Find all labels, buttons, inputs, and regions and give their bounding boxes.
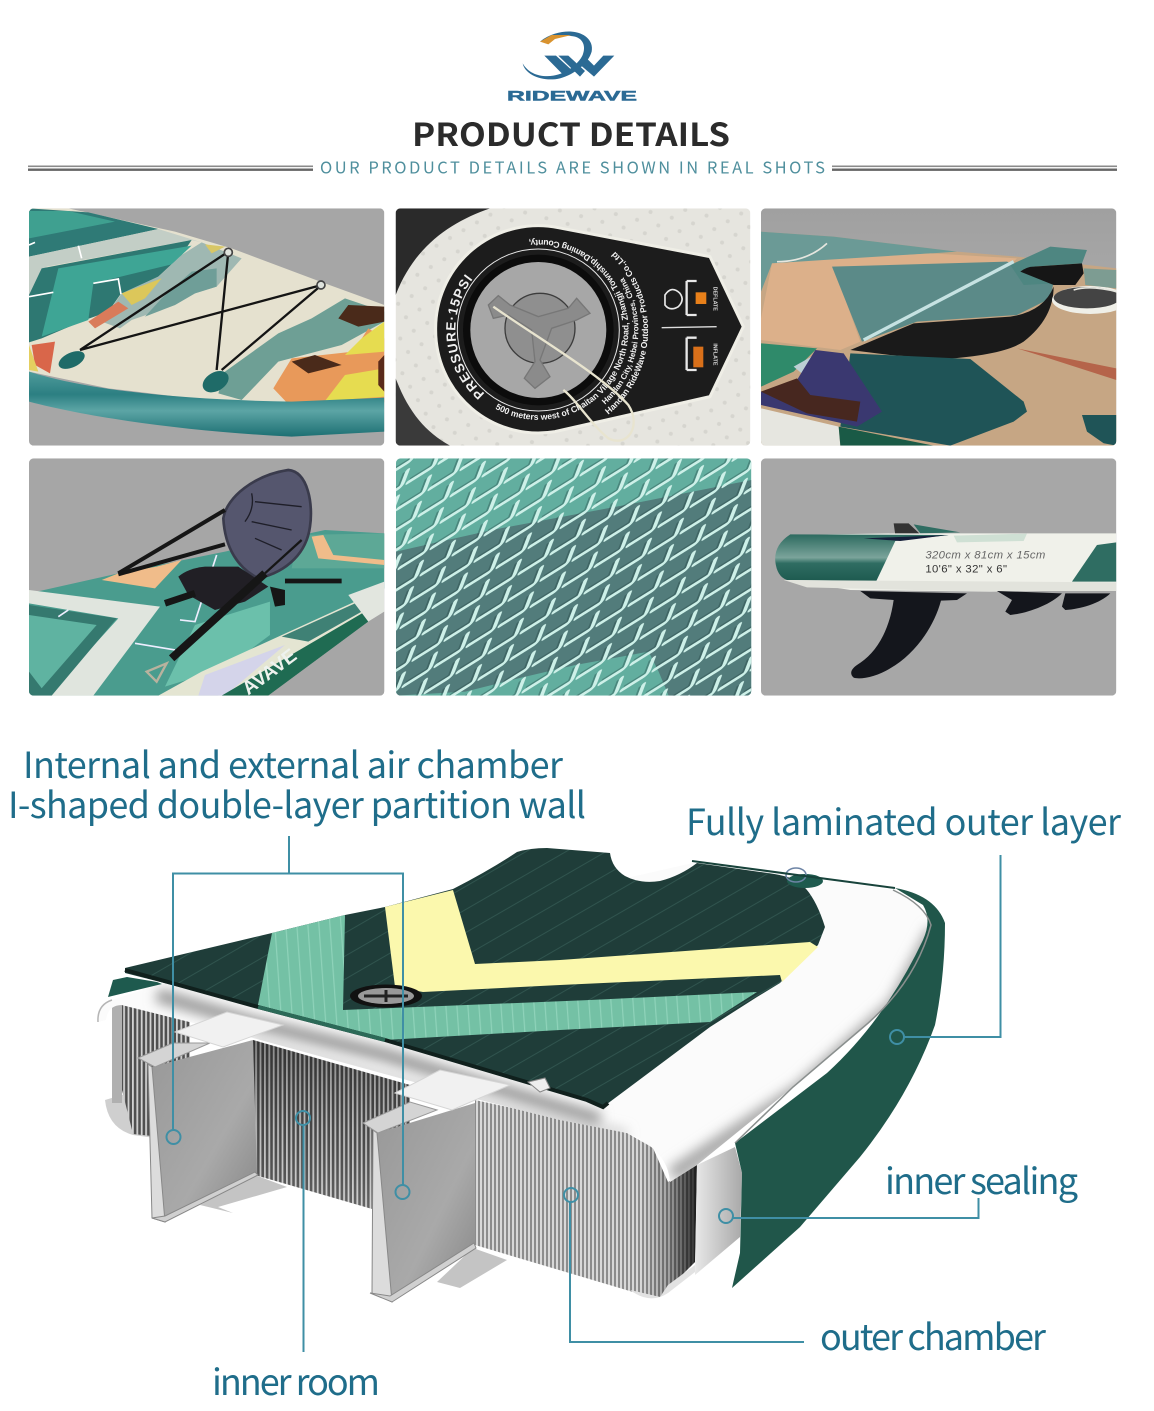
photo: air valve badge [396, 208, 750, 446]
logo: RideWave [507, 32, 637, 103]
inflate and deflate icons [662, 281, 717, 370]
bungee cords [80, 252, 322, 370]
back curl and left ribs [105, 1003, 190, 1140]
I-beam 1 [138, 1040, 258, 1222]
inner sealing layer [695, 1147, 742, 1275]
white top tabs [175, 1012, 510, 1110]
inflate and deflate icons: INFLATE [711, 343, 717, 366]
rear feet [200, 1175, 507, 1288]
handle [894, 523, 920, 534]
inflate and deflate icons: DEFLATE [711, 287, 717, 311]
seat back [223, 470, 311, 578]
badge [436, 226, 743, 433]
photo: kayak seat [29, 458, 384, 700]
ring text: Handan City, Hebei Provinces, China [602, 277, 638, 404]
tail ring [786, 868, 823, 888]
subtitle with rules: OUR PRODUCT DETAILS ARE SHOWN IN REAL SHOTS [320, 154, 825, 178]
cross-section diagram of board [98, 848, 945, 1302]
rail [29, 372, 384, 437]
callout: air chamber partition wall: Internal and external air chamber [23, 737, 564, 789]
logo: RideWave: RIDEWAVE [507, 88, 637, 104]
photo: tail kick pad [761, 208, 1129, 446]
ring text: Handan RideWave Outdoor Products Co.,Ltd [604, 252, 648, 414]
seat pad [178, 567, 268, 610]
title: PRODUCT DETAILS [412, 110, 730, 156]
deck pad [108, 848, 895, 1107]
callout: inner sealing [719, 1153, 1078, 1223]
callout: inner sealing: inner sealing [885, 1153, 1078, 1205]
fins [851, 591, 1110, 678]
ring text: 500 meters west of Chaitan Village North Road, Zhangji Township,Daming County, [496, 238, 630, 420]
board body [787, 533, 1116, 592]
dimensions text [926, 551, 1045, 572]
callout: air chamber partition wall [8, 737, 586, 1199]
ring text: PRESSURE·15PSI [446, 274, 484, 400]
ring text [446, 238, 648, 420]
photo: nose with bungee [29, 208, 384, 446]
dimensions text: 10'6" x 32" x 6" [925, 563, 1007, 575]
board: AVAVE [239, 645, 301, 700]
end rib panel [475, 1100, 697, 1298]
kick pad side [850, 287, 1054, 359]
callout: inner room [212, 1111, 380, 1406]
callout: fully laminated outer layer: Fully laminated outer layer [686, 794, 1122, 846]
straps [118, 510, 342, 682]
white inner top surface [97, 920, 928, 1182]
callout: outer chamber [564, 1188, 1047, 1361]
valve [457, 249, 619, 411]
deck art [29, 208, 384, 405]
photo: board side with fins [761, 458, 1116, 696]
rear valve [777, 243, 1129, 314]
I-beam 2 [363, 1102, 476, 1302]
callout: air chamber partition wall: I-shaped double-layer partition wall [8, 777, 586, 829]
middle rib panel [253, 1040, 410, 1220]
rope [493, 307, 634, 441]
callout: fully laminated outer layer [686, 794, 1122, 1044]
callout: outer chamber: outer chamber [820, 1309, 1047, 1361]
deck valve [350, 984, 422, 1008]
dimensions text: 320cm x 81cm x 15cm [925, 549, 1045, 561]
outer green laminate [732, 888, 945, 1288]
callout: inner room: inner room [212, 1354, 380, 1406]
photo: diamond grip traction pad [396, 458, 751, 696]
board [29, 530, 384, 700]
